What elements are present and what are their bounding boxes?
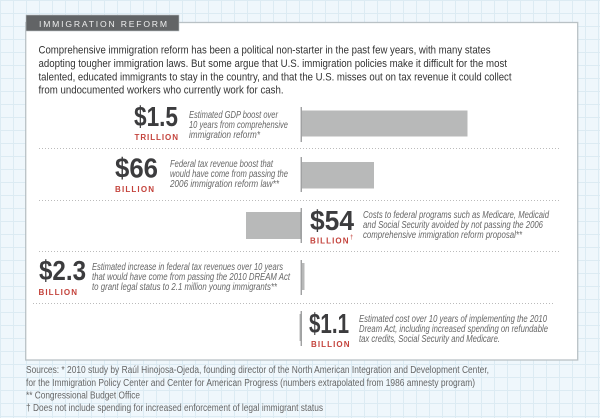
row 5: $1.1 billion: Estimated cost over 10 years of implementing the 2010 xyxy=(359,314,547,325)
bar: $66 billion xyxy=(301,157,374,192)
intro text: from undocumented workers who currently work for cash. xyxy=(38,84,284,96)
row 5: $1.1 billion: BILLION xyxy=(311,340,350,349)
row 4: $2.3 billion: Estimated increase in federal tax revenues over 10 years xyxy=(92,262,283,273)
sources xyxy=(26,365,489,414)
intro text: adopting tougher immigration laws. But some argue that U.S. immigration policies make it difficult for the most xyxy=(38,58,507,70)
row 4: $2.3 billion: $2.3 xyxy=(39,255,86,286)
row 3: $54 billion: BILLION xyxy=(310,236,349,246)
sources: Sources: * 2010 study by Raúl Hinojosa-Ojeda, founding director of the North American Integration and Development Center, xyxy=(26,365,489,376)
bar: $54 billion xyxy=(246,208,302,243)
row 1: $1.5 trillion: Estimated GDP boost over xyxy=(189,110,279,121)
sources: for the Immigration Policy Center and Center for American Progress (numbers extrapolated from 1986 amnesty program) xyxy=(26,378,475,389)
row 1: $1.5 trillion: $1.5 xyxy=(134,101,178,132)
row 5: $1.1 billion: tax credits, Social Security and Medicare. xyxy=(359,334,500,345)
title tab xyxy=(26,15,179,31)
row 4: $2.3 billion: to grant legal status to 2.1 million young immigrants** xyxy=(92,282,278,293)
title tab: IMMIGRATION REFORM xyxy=(39,19,167,29)
row 5: $1.1 billion: $1.1 xyxy=(309,308,349,339)
row 4: $2.3 billion: that would have come from passing the 2010 DREAM Act xyxy=(92,272,291,283)
main panel xyxy=(26,15,578,360)
row 3: $54 billion: Costs to federal programs such as Medicare, Medicaid xyxy=(363,210,549,221)
bar: $1.1 billion xyxy=(300,311,302,346)
row 3: $54 billion: comprehensive immigration reform proposal** xyxy=(363,230,523,241)
row 5: $1.1 billion: Dream Act, including increased spending on refundable xyxy=(359,324,548,335)
intro text: Comprehensive immigration reform has been a political non-starter in the past few years, with many states xyxy=(38,44,491,56)
row 3: $54 billion: † xyxy=(350,235,353,241)
sources: ** Congressional Budget Office xyxy=(26,390,140,402)
row 2: $66 billion: BILLION xyxy=(115,185,154,194)
intro text xyxy=(38,44,512,96)
row 1: $1.5 trillion: immigration reform* xyxy=(189,130,261,141)
row 2: $66 billion: would have come from passing the xyxy=(170,169,288,180)
row 1: $1.5 trillion: TRILLION xyxy=(134,133,178,142)
row 5: $1.1 billion xyxy=(309,308,548,349)
row 4: $2.3 billion: BILLION xyxy=(38,288,77,297)
sources: † Does not include spending for increased enforcement of legal immigrant status xyxy=(26,403,323,414)
row 2: $66 billion xyxy=(115,152,288,194)
row 2: $66 billion: $66 xyxy=(115,152,158,184)
row 3: $54 billion: $54 xyxy=(310,205,355,236)
row 4: $2.3 billion xyxy=(38,255,291,297)
row 3: $54 billion: and Social Security avoided by not passing the 2006 xyxy=(363,220,543,231)
intro text: talented, educated immigrants to stay in the country, and that the U.S. misses out on tax revenue it could collect xyxy=(38,72,512,84)
row 2: $66 billion: 2006 immigration reform law** xyxy=(169,179,280,190)
row 2: $66 billion: Federal tax revenue boost that xyxy=(170,159,274,170)
row 1: $1.5 trillion: 10 years from comprehensive xyxy=(189,120,288,131)
bar: $2.3 billion xyxy=(301,260,304,295)
row 1: $1.5 trillion xyxy=(134,101,288,142)
row 3: $54 billion xyxy=(310,205,549,246)
bar: $1.5 trillion xyxy=(301,107,468,142)
